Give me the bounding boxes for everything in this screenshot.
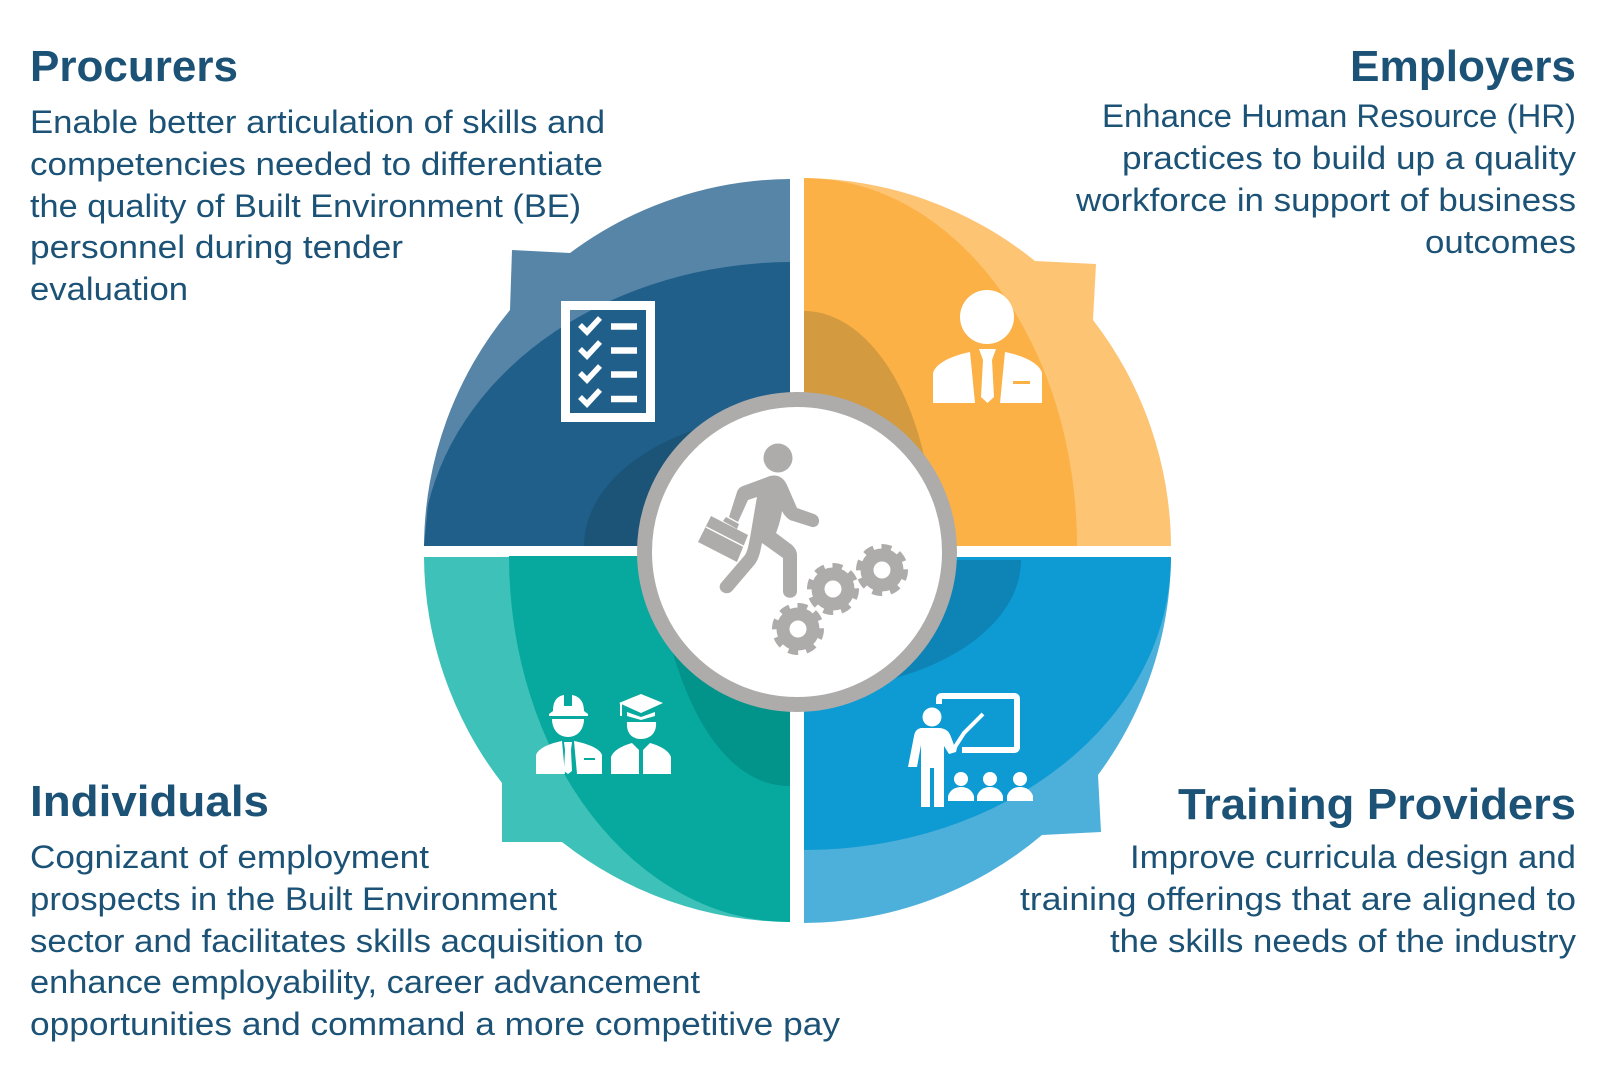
text block: procurers description: competencies needed to differentiate <box>30 146 603 182</box>
text block: employers description <box>1075 98 1576 260</box>
text block: individuals description: prospects in the Built Environment <box>30 881 557 917</box>
text block: procurers description: the quality of Built Environment (BE) <box>30 188 581 224</box>
text block: training providers description: Improve curricula design and <box>1130 839 1576 875</box>
text block: procurers description: personnel during tender <box>30 229 403 265</box>
heading: Individuals: Individuals <box>30 777 269 826</box>
icon: trainer at board <box>908 696 1033 807</box>
icon: walking businessman on gears <box>698 444 905 652</box>
icon: checklist <box>566 306 650 418</box>
text block: training providers description: training offerings that are aligned to <box>1020 881 1576 917</box>
panel: training providers quadrant <box>804 557 1171 923</box>
text block: employers description: Enhance Human Resource (HR) <box>1102 98 1576 134</box>
text block: procurers description <box>30 104 605 307</box>
text block: employers description: workforce in support of business <box>1075 182 1576 218</box>
heading: Procurers: Procurers <box>30 42 238 91</box>
text block: procurers description: evaluation <box>30 271 188 307</box>
panel: procurers quadrant <box>424 179 790 546</box>
text block: individuals description: opportunities and command a more competitive pay <box>30 1006 840 1042</box>
text block: training providers description <box>1020 839 1576 959</box>
panel: employers quadrant <box>804 178 1171 546</box>
text block: training providers description: the skills needs of the industry <box>1110 923 1576 959</box>
text block: procurers description: Enable better articulation of skills and <box>30 104 605 140</box>
icon: employer in suit <box>933 290 1042 403</box>
text block: employers description: outcomes <box>1425 224 1576 260</box>
text block: individuals description: sector and facilitates skills acquisition to <box>30 923 643 959</box>
heading: Employers: Employers <box>1350 42 1576 91</box>
text block: individuals description: enhance employability, career advancement <box>30 964 700 1000</box>
icon: worker and graduate <box>536 694 671 774</box>
text block: employers description: practices to build up a quality <box>1122 140 1576 176</box>
text block: individuals description <box>30 839 840 1042</box>
heading: Training Providers: Training Providers <box>1178 780 1576 829</box>
text block: individuals description: Cognizant of employment <box>30 839 429 875</box>
central circle <box>644 400 950 704</box>
panel: individuals quadrant <box>424 556 790 922</box>
